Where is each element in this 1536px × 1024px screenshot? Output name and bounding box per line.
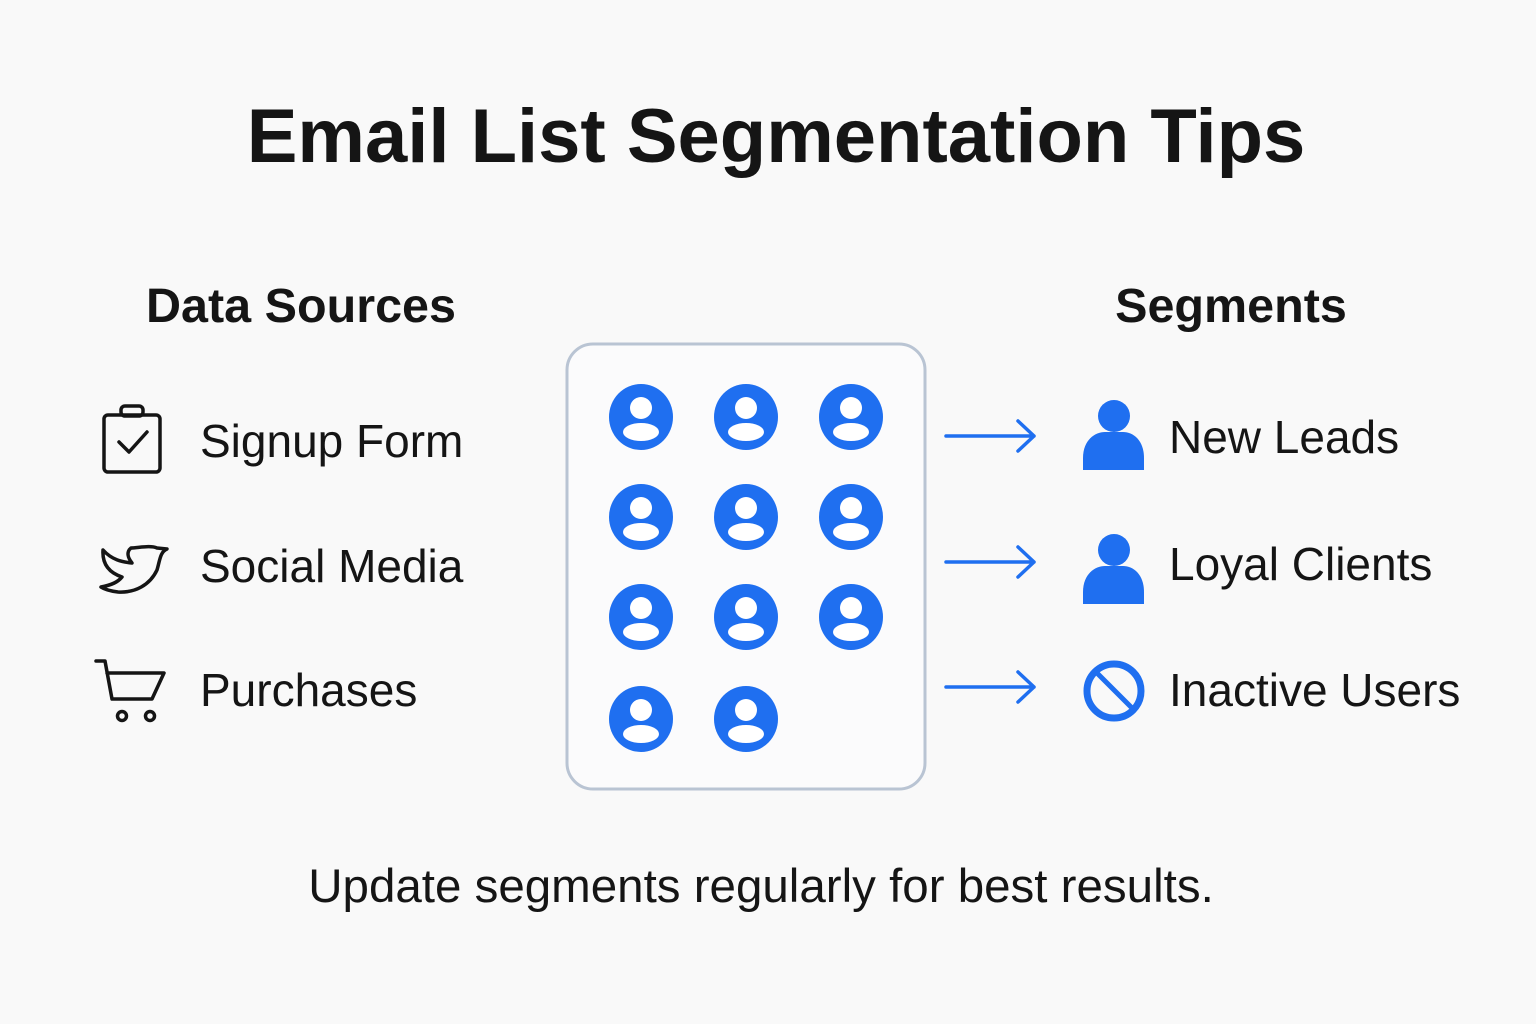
text: loyal clients: Loyal Clients bbox=[1169, 538, 1432, 590]
icon grid: users bbox=[609, 384, 883, 752]
heading: data sources: Data Sources bbox=[146, 279, 456, 333]
panel: data sources list bbox=[96, 406, 464, 720]
icon: loyal clients person bbox=[1083, 534, 1144, 604]
panel: segments list bbox=[1083, 400, 1460, 718]
icon: inactive block bbox=[1087, 664, 1141, 718]
arrows bbox=[946, 421, 1034, 702]
text: inactive users: Inactive Users bbox=[1169, 664, 1460, 716]
icon: cart bbox=[96, 661, 164, 720]
icon: bird bbox=[101, 547, 167, 592]
footer note: Update segments regularly for best results. bbox=[308, 860, 1214, 913]
panel: contact list box bbox=[567, 344, 925, 789]
icon: clipboard bbox=[104, 406, 160, 472]
text: purchases: Purchases bbox=[200, 664, 417, 716]
heading: segments: Segments bbox=[1115, 279, 1347, 333]
icon: new leads person bbox=[1083, 400, 1144, 470]
text: signup form: Signup Form bbox=[200, 415, 463, 467]
text: new leads: New Leads bbox=[1169, 411, 1399, 463]
title: Email List Segmentation Tips bbox=[247, 94, 1305, 179]
text: social media: Social Media bbox=[200, 540, 464, 592]
